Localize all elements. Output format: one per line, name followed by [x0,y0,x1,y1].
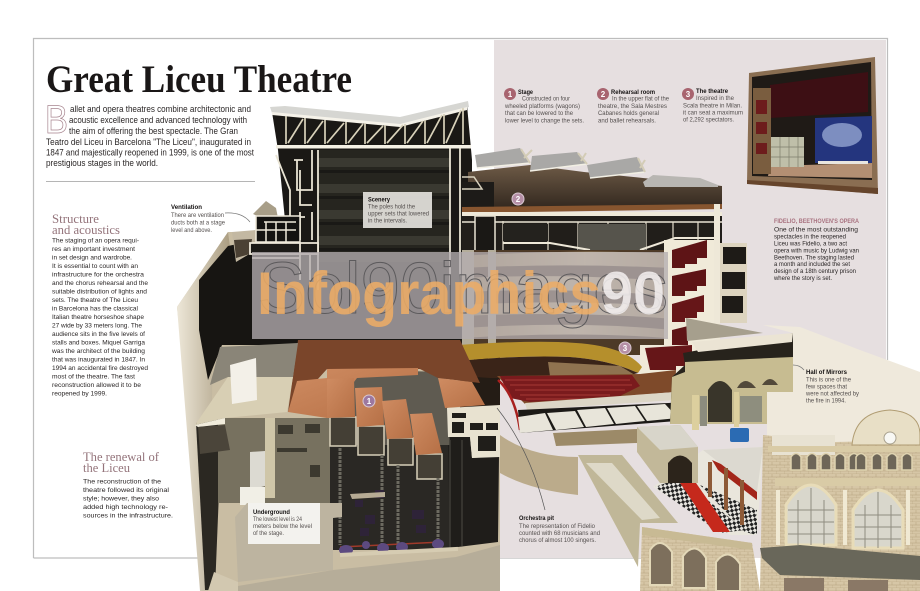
label: rehearsal room: In the upper flat of the [612,96,669,102]
label: orchestra pit: Orchestra pit [519,515,555,522]
label: rehearsal room [597,88,669,124]
inset: La Scala stage picture [747,57,878,194]
label: underground: of the stage. [253,530,284,537]
number marker 3 [619,342,631,354]
auditorium upper floors and rehearsal room [462,177,722,252]
label: stage: Stage [518,89,533,96]
text block: structure and acoustics: 27 wide by 33 meters long. The [52,322,142,330]
label: hall of mirrors: few spaces that [806,384,847,390]
text block: structure and acoustics: was the architect of the building [51,348,145,355]
gold balcony [458,342,642,378]
text block: structure and acoustics: and the chorus rehearsal and the [52,280,148,287]
text block: structure and acoustics: and acoustics [52,222,120,237]
text block: structure and acoustics [51,211,148,398]
text block: structure and acoustics: The staging of an opera requi- [52,238,139,244]
text block: structure and acoustics: reopened by 1999. [52,390,107,398]
main facade [760,410,920,591]
label: scenery: The poles hold the [368,204,415,210]
text block: the renewal of the Liceu: style; however, they also [83,496,159,502]
label: the theatre: Inspired in the [696,95,734,102]
text block: Fidelio: Beethoven. The staging lasted [774,254,854,262]
label: rehearsal room: and ballet rehearsals. [598,118,656,124]
text block: structure and acoustics: res an important investment [52,246,135,253]
text block: structure and acoustics: sets. The theatre of The Liceu [52,297,138,304]
text block: structure and acoustics: that was inaugurated in 1847. In [52,356,145,364]
text block: Fidelio: FIDELIO, BEETHOVEN'S OPERA [774,218,859,225]
label: scenery: upper sets that lowered [368,210,429,218]
text block: structure and acoustics: in set design and wardrobe. [52,254,132,262]
label: hall of mirrors: Hall of Mirrors [806,369,847,376]
text block: structure and acoustics: 1994 an accidental fire destroyed [52,365,148,372]
text block: the renewal of the Liceu: the Liceu [83,460,130,475]
text block: structure and acoustics: Structure [52,211,99,226]
label: orchestra pit [497,408,600,544]
label: hall of mirrors: the fire in 1994. [806,398,846,404]
label: orchestra pit: chorus of almost 100 singers. [519,537,596,544]
label: stage: 1 [508,90,513,99]
text block: structure and acoustics: audience sits in the five levels of [52,331,145,338]
text block: structure and acoustics: It is essential to count with an [52,263,138,270]
watermark band: Infographics90 [257,260,665,327]
label: underground: The lowest level is 24 [253,516,302,523]
intro text block: allet and opera theatres combine architectonic and [70,104,251,114]
text block: Fidelio: where the story is set. [773,275,832,282]
label: rehearsal room: 2 [601,90,606,99]
red seating boxes [640,204,747,375]
intro text block: the aim of offering the best spectacle. The Gran [69,126,238,136]
title: Great Liceu Theatre [46,58,352,101]
label: scenery: Scenery [368,196,390,204]
small vent block [250,201,318,280]
basement machinery [339,440,462,557]
label: rehearsal room: Rehearsal room [611,89,655,96]
label: orchestra pit: counted with 68 musicians and [519,530,600,537]
text block: the renewal of the Liceu: sources in the infrastructure. [83,512,173,520]
text block: Fidelio [773,218,859,282]
text block: Fidelio: design of a 18th century prison [774,268,856,275]
label: stage: Constructed on four [522,96,571,102]
stage floor planks [518,402,690,446]
lower stage shell [177,230,500,591]
intro text block: Teatro del Liceu in Barcelona "The Liceu", inaugurated in [46,137,251,147]
corridor [578,455,678,567]
label: rehearsal room: theatre, the Sala Mestres [598,103,667,110]
number marker 1 [363,395,375,407]
text block: the renewal of the Liceu: added high technology re- [83,504,168,511]
text block: the renewal of the Liceu: theatre followed its original [83,487,170,494]
number marker 3: 3 [623,344,628,353]
label: hall of mirrors [793,365,860,404]
panel: pink background [494,40,886,558]
label: scenery: in the intervals. [368,218,407,224]
drop cap: B [45,98,68,142]
orchestra pit wall [500,435,578,495]
auditorium roof sawtooth [468,148,722,208]
label: stage: lower level to change the sets. [505,118,584,124]
label: the theatre: 3 [686,90,691,99]
label: orchestra pit: The representation of Fidelio [519,523,595,530]
label: underground [248,503,320,544]
text block: Fidelio: opera with music by Ludwig van [774,248,859,254]
label: ventilation: Ventilation [171,204,202,211]
text block: the renewal of the Liceu [83,449,173,520]
number marker 2: 2 [516,195,521,204]
text block: structure and acoustics: Italian theatre horseshoe shape [52,314,144,321]
label: stage: wheeled platforms (wagons) [504,103,580,110]
text block: Fidelio: spectacles in the reopened [774,234,846,240]
text block: structure and acoustics: infrastructure for the orchestra [52,272,144,278]
label: scenery [363,192,432,228]
concrete base [208,503,500,591]
number marker 2 [512,193,524,205]
intro text block: prestigious stages in the world. [46,158,158,168]
label: hall of mirrors: were not affected by [805,390,860,398]
text block: the renewal of the Liceu: The renewal of [83,449,160,464]
label: underground: meters below the level [253,523,312,530]
label: ventilation: level and above. [171,227,212,234]
label: the theatre: Scala theatre in Milan. [683,102,742,110]
label: underground: Underground [253,509,290,516]
label: the theatre: it can seat a maximum [683,110,743,116]
text block: structure and acoustics: most of the theatre. The fast [52,374,135,380]
label: the theatre: of 2,292 spectators. [683,116,734,124]
intro text block [45,98,254,168]
auditorium tiers [462,250,708,365]
fly tower with roof truss [270,101,472,290]
intro text block: 1847 and majestically reopened in 1999, is one of the most [46,148,254,158]
hall of mirrors building [670,318,920,450]
front left facade [640,527,760,591]
label: hall of mirrors: This is one of the [806,376,851,384]
stage lifts and wooden floors [195,340,500,505]
stalls seating [497,370,676,430]
label: stage [504,88,584,124]
theatre cross-section illustration [177,101,920,591]
text block: structure and acoustics: in Barcelona has the classical [52,306,139,312]
label: stage: that can be lowered to the [505,110,573,117]
text block: Fidelio: Liceu was Fidelio, a two act [774,240,847,248]
text block: the renewal of the Liceu: The reconstruction of the [83,478,161,486]
watermark band: Sol90images [258,249,668,329]
text block: Fidelio: One of the most outstanding [774,226,858,234]
label: ventilation: ducts both at a stage [171,220,225,226]
label: the theatre: The theatre [696,88,728,95]
intro text block: acoustic excellence and advanced technology with [69,115,247,125]
number marker 1: 1 [367,397,372,406]
text block: structure and acoustics: suitable distribution of lights and [52,288,147,296]
text block: Fidelio: a month and included the set [774,261,850,268]
red carpeted hall [637,425,763,535]
label: the theatre [682,88,743,124]
label: ventilation: There are ventilation [171,212,224,219]
text block: structure and acoustics: reconstruction allowed it to be [52,382,141,389]
label: rehearsal room: Cabanes holds general [598,110,659,117]
text block: structure and acoustics: stalls and boxes. Miquel Garriga [52,340,145,346]
label: ventilation [171,204,250,234]
